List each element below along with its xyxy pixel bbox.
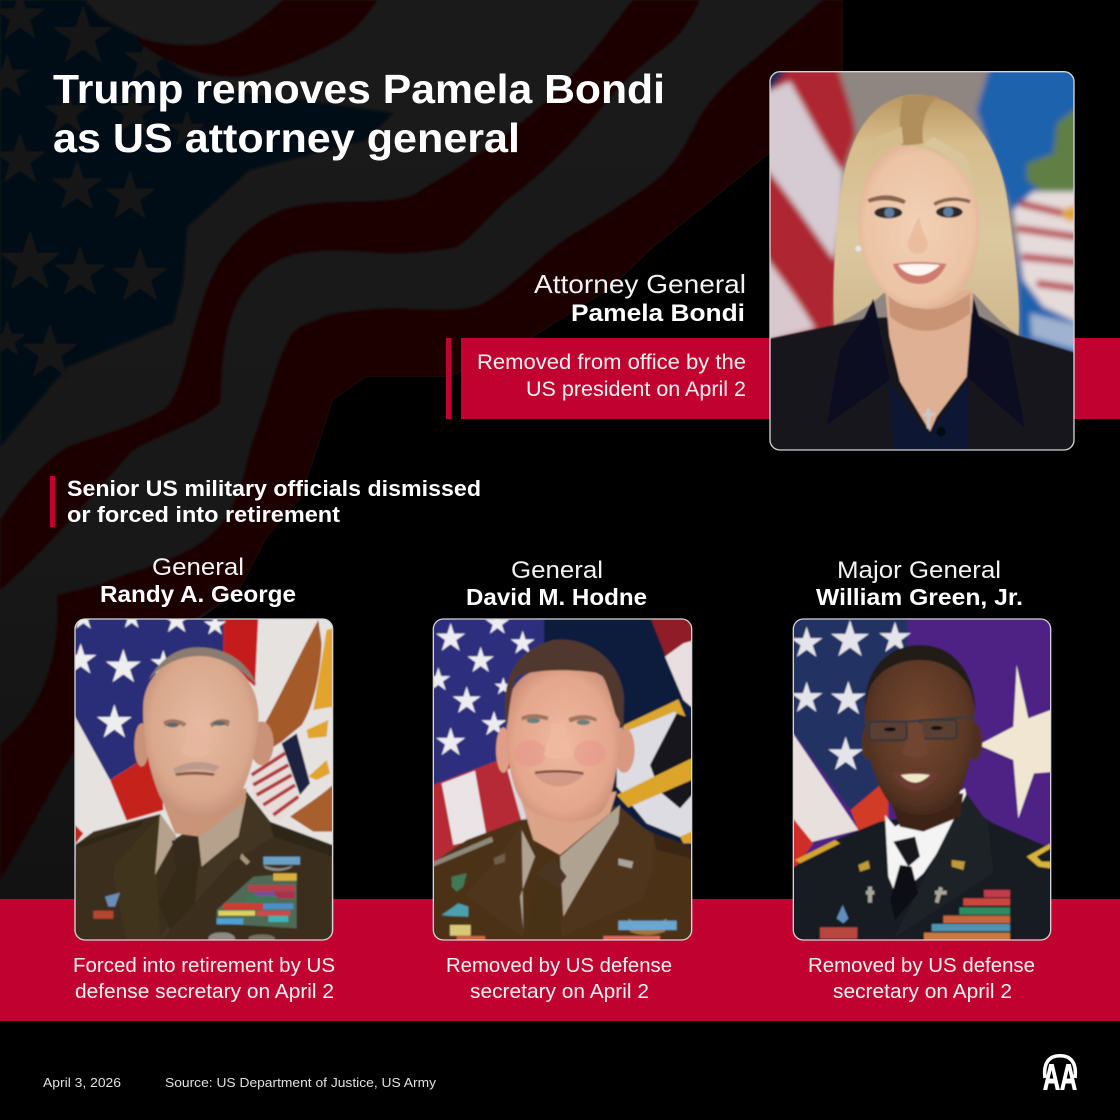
side bar and heading: military officials — [50, 476, 481, 527]
caption: George: Forced into retirement by US — [73, 954, 335, 977]
red band: Bondi — [446, 338, 1120, 419]
label: General Randy A. George — [100, 554, 296, 607]
title — [53, 66, 665, 161]
footer: date: April 3, 2026 — [43, 1076, 121, 1090]
label: Major General William Green, Jr.: William Green, Jr. — [816, 584, 1023, 610]
caption: Green — [808, 954, 1035, 1003]
title: as US attorney general — [53, 115, 520, 161]
label: General David M. Hodne — [466, 557, 647, 610]
caption: George: defense secretary on April 2 — [75, 980, 334, 1003]
caption: Hodne: Removed by US defense — [446, 954, 672, 977]
label: Attorney General Pamela Bondi: Attorney General — [534, 269, 746, 299]
ribbons — [217, 873, 297, 928]
side bar and heading: military officials: Senior US military officials dismissed — [67, 476, 481, 501]
photo: David M. Hodne — [426, 611, 695, 943]
side bar and heading: military officials: or forced into retirement — [67, 502, 341, 527]
label: Major General William Green, Jr. — [816, 557, 1023, 610]
caption: Green: secretary on April 2 — [833, 980, 1012, 1003]
label: Major General William Green, Jr.: Major General — [837, 557, 1001, 584]
ribbons — [924, 890, 1010, 940]
label: General David M. Hodne: David M. Hodne — [466, 584, 647, 610]
label: General David M. Hodne: General — [511, 557, 603, 584]
logo: AA — [1043, 1056, 1077, 1098]
title: Trump removes Pamela Bondi — [53, 66, 665, 112]
caption: Hodne — [446, 954, 672, 1003]
bottom red band — [0, 899, 1120, 1021]
label: General Randy A. George: General — [152, 554, 244, 581]
decorative red stripes — [0, 0, 843, 880]
text: Bondi removal: Removed from office by the — [477, 350, 746, 374]
label: Attorney General Pamela Bondi: Pamela Bondi — [571, 300, 745, 327]
background: dark waving US flag — [0, 0, 843, 899]
text: Bondi removal: US president on April 2 — [526, 377, 746, 401]
footer: source: Source: US Department of Justice, US Army — [165, 1076, 437, 1090]
logo: AA: AA — [1043, 1056, 1077, 1098]
label: General Randy A. George: Randy A. George — [100, 581, 296, 607]
caption: Green: Removed by US defense — [808, 954, 1035, 977]
photo: Pamela Bondi — [769, 71, 1075, 451]
caption: George — [73, 954, 335, 1003]
caption: Hodne: secretary on April 2 — [470, 980, 649, 1003]
photo: Randy A. George — [65, 605, 337, 944]
text: Bondi removal — [477, 350, 746, 401]
label: Attorney General Pamela Bondi — [534, 269, 746, 327]
photo: William Green, Jr. — [791, 617, 1055, 943]
